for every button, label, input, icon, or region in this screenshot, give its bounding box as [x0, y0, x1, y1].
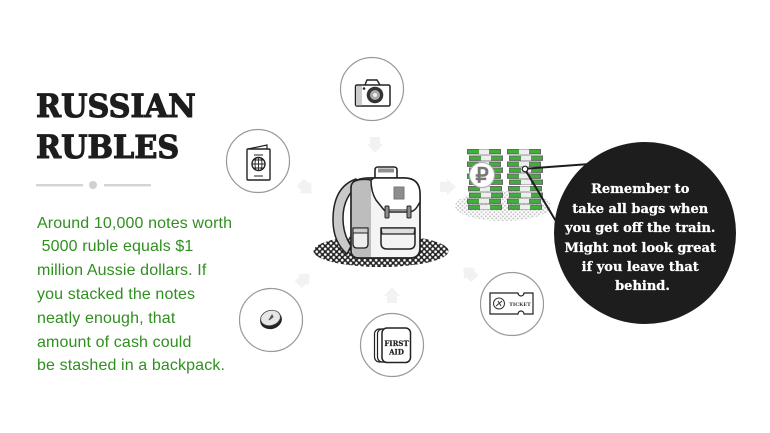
title	[36, 87, 196, 166]
title: RUSSIAN	[36, 87, 196, 125]
callout: black circle: behind.	[615, 279, 670, 294]
icon: ruble coin	[470, 162, 494, 188]
callout: black circle: take all bags when	[572, 202, 709, 217]
icon: compass	[240, 288, 302, 352]
callout: black circle: if you leave that	[582, 260, 699, 275]
icon: ticket	[480, 272, 544, 336]
icon: first aid kit: FIRST	[384, 339, 409, 348]
callout: black circle: Might not look great	[564, 241, 716, 256]
divider: title ornament	[36, 181, 151, 189]
shadow: backpack halftone	[314, 235, 448, 267]
arrow: compass to backpack	[293, 268, 315, 290]
arrow: passport to backpack	[295, 177, 317, 199]
icon: ruble coin: ₽	[475, 164, 489, 188]
callout: leader lines	[522, 164, 590, 223]
icon: first aid kit: AID	[388, 348, 404, 356]
text block: rubles description: Around 10,000 notes worth 5000 ruble equals $1 million Aussie dollars. If you stacked the notes neatly enough, that amount of cash could be stashed in a backpack.	[37, 214, 232, 374]
callout: black circle	[554, 142, 736, 324]
chart: left ruble stack	[467, 149, 503, 210]
shadow: money halftone	[455, 191, 551, 221]
arrow: ticket to backpack	[458, 262, 480, 284]
icon: backpack	[333, 167, 420, 258]
icon: first aid kit	[360, 314, 424, 376]
callout: black circle: you get off the train.	[564, 221, 715, 236]
icon: passport	[226, 130, 290, 192]
arrow: camera to backpack	[367, 137, 383, 153]
chart: right ruble stack	[507, 149, 543, 210]
arrow: backpack to money	[440, 179, 456, 195]
icon: camera	[340, 58, 404, 120]
title: RUBLES	[36, 128, 179, 166]
icon: ticket: TICKET	[509, 302, 531, 308]
arrow: first aid to backpack	[384, 287, 400, 303]
callout: black circle: Remember to	[591, 182, 690, 197]
